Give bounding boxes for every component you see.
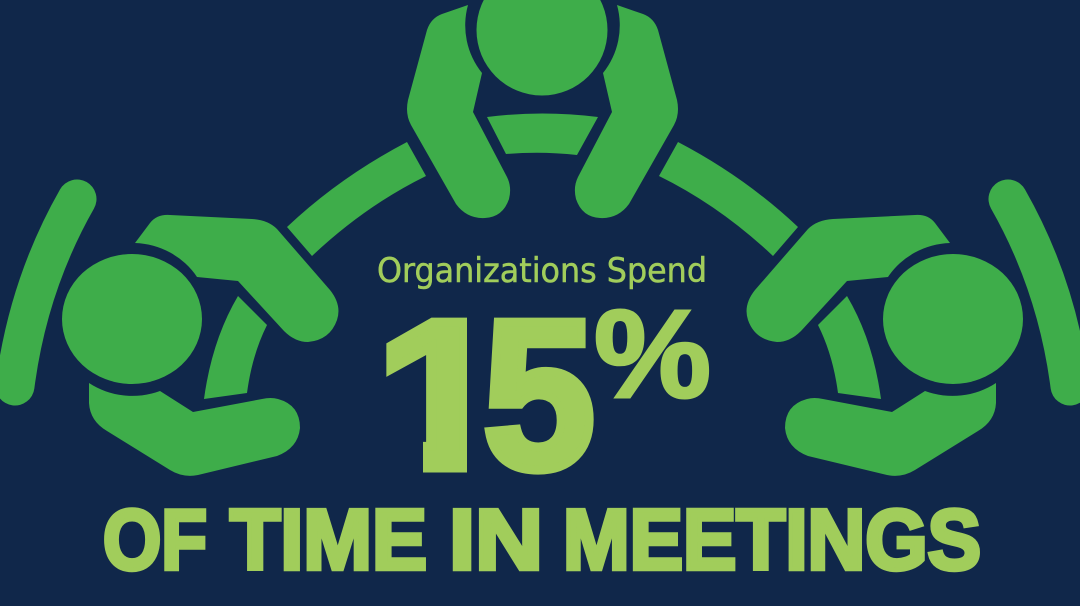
- lower arm: [89, 383, 300, 476]
- word: MEETINGS: MEETINGS: [563, 493, 981, 588]
- illustration: meeting table seen from above: [15, 0, 1070, 476]
- person: top: [407, 0, 678, 218]
- text: intro line: Organizations Spend: [377, 251, 707, 291]
- right arm: [575, 5, 678, 218]
- outer chair arc: [15, 199, 77, 386]
- lower arm: [785, 383, 996, 476]
- upper arm: [747, 215, 950, 342]
- table segment: [487, 114, 598, 155]
- word: IN: IN: [449, 493, 543, 588]
- big number: 15%: [386, 308, 710, 475]
- digit 5: 5: [483, 276, 595, 513]
- digit 1: 1: [375, 276, 509, 513]
- head: [476, 0, 608, 96]
- upper arm: [135, 215, 338, 342]
- table arc in front of person: [818, 296, 881, 399]
- text: closing line: [103, 493, 981, 588]
- head: [62, 254, 202, 384]
- person: right: [747, 199, 1070, 476]
- table arc: upper left: [287, 142, 426, 256]
- table arc in front of person: [204, 296, 267, 399]
- percent sign: %: [594, 285, 711, 424]
- person: left: [15, 199, 338, 476]
- head: [883, 254, 1023, 384]
- outer chair arc: [1008, 199, 1070, 386]
- word: TIME: TIME: [230, 493, 427, 588]
- word: OF: OF: [103, 493, 207, 588]
- left arm: [407, 5, 510, 218]
- table arc: upper right: [659, 142, 798, 256]
